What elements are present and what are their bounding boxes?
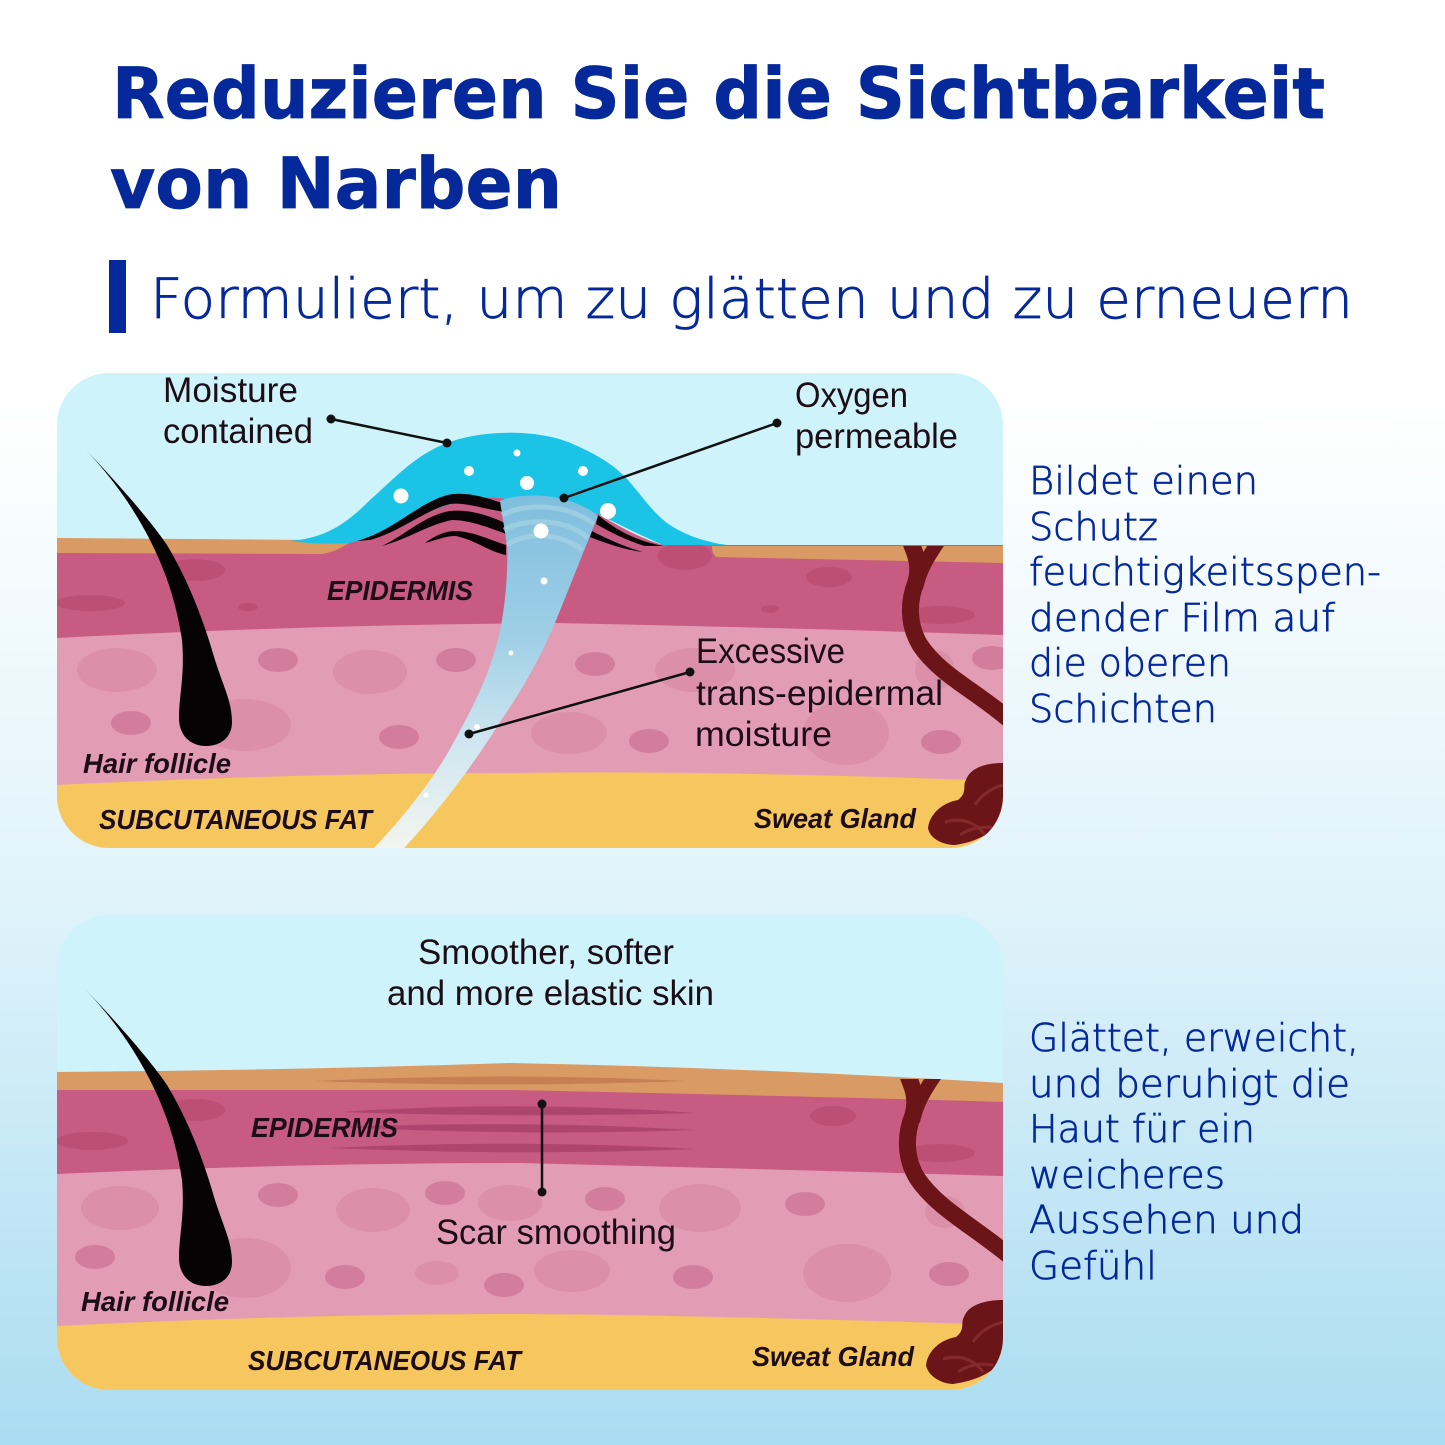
sky [57,373,1003,545]
text block: forms a protective film: Schutz [1029,505,1158,549]
callout: moisture contained [164,376,452,448]
outer skin layer [57,1063,1003,1102]
epidermis cells [55,542,975,624]
text block: smooths and soothes: Haut für ein [1029,1107,1255,1151]
layer labels [81,1112,915,1376]
callout: excessive moisture [464,638,941,746]
subtitle accent bar [109,260,126,333]
title [110,53,1325,225]
epidermis scar streaks [330,1106,695,1152]
text block: smooths and soothes: und beruhigt die [1029,1062,1350,1106]
callout: oxygen permeable: permeable [795,417,958,456]
text block: forms a protective film: Schichten [1029,687,1217,731]
layer labels [83,575,917,835]
sky [57,915,1003,998]
dermis cells [75,1181,969,1302]
moisture column [374,495,598,848]
callout: scar smoothing [436,1100,676,1252]
blood vessel [908,536,1012,722]
text block: smooths and soothes: Gefühl [1029,1244,1157,1288]
callout: oxygen permeable: Oxygen [795,376,908,415]
layer labels: EPIDERMIS [251,1112,398,1143]
text block: smooths and soothes: weicheres [1029,1153,1225,1197]
blood vessel [905,1069,1012,1258]
outer skin layer [57,538,1003,563]
epidermis cells [56,1099,975,1162]
callout: moisture contained: Moisture [163,371,298,410]
subtitle: Formuliert, um zu glätten und zu erneuern [150,267,1353,331]
text block: forms a protective film [1029,459,1381,731]
callout: excessive moisture: Excessive [696,632,845,671]
epidermis layer [57,1085,1003,1176]
title: Reduzieren Sie die Sichtbarkeit [112,53,1325,135]
text block: forms a protective film: die oberen [1029,641,1231,685]
epidermis layer [57,497,1003,638]
sweat gland [926,1300,1003,1384]
layer labels: Sweat Gland [752,1341,915,1372]
moisture droplets [394,450,616,798]
text block: forms a protective film: feuchtigkeitsspen- [1029,550,1381,594]
subcutaneous fat layer [57,765,1003,848]
text block: smooths and soothes [1029,1016,1359,1288]
callout: excessive moisture: moisture [695,715,832,754]
hair follicle [84,988,232,1286]
dermis layer [57,1160,1003,1326]
layer labels: SUBCUTANEOUS FAT [99,804,375,835]
callout: excessive moisture: trans-epidermal [696,674,943,713]
hair follicle [84,448,232,746]
panel: moisture film diagram [55,371,1012,848]
outer skin streak [315,1076,685,1084]
callout: smoother skin [388,938,712,1006]
subcutaneous fat layer [57,1314,1003,1390]
text block: smooths and soothes: Glättet, erweicht, [1029,1016,1359,1060]
layer labels: Hair follicle [81,1286,229,1317]
dermis cells [77,646,1012,765]
dermis layer [57,620,1003,785]
sweat gland [928,763,1003,845]
callout: smoother skin: Smoother, softer [418,933,674,972]
text block: forms a protective film: Bildet einen [1029,459,1258,503]
title: von Narben [110,143,562,225]
callout: scar smoothing: Scar smoothing [436,1213,676,1252]
layer labels: EPIDERMIS [327,575,473,606]
protective dome film [290,433,727,545]
callout: moisture contained: contained [163,412,313,451]
callout: oxygen permeable [560,376,958,502]
text block: forms a protective film: dender Film auf [1029,596,1336,640]
layer labels: Sweat Gland [754,803,917,834]
layer labels: Hair follicle [83,748,231,779]
text block: smooths and soothes: Aussehen und [1029,1198,1304,1242]
callout: smoother skin: and more elastic skin [387,974,714,1013]
panel: smoothed skin diagram [56,915,1012,1390]
moisture ripples [502,507,594,550]
scar ridges [357,494,664,555]
layer labels: SUBCUTANEOUS FAT [248,1345,524,1376]
